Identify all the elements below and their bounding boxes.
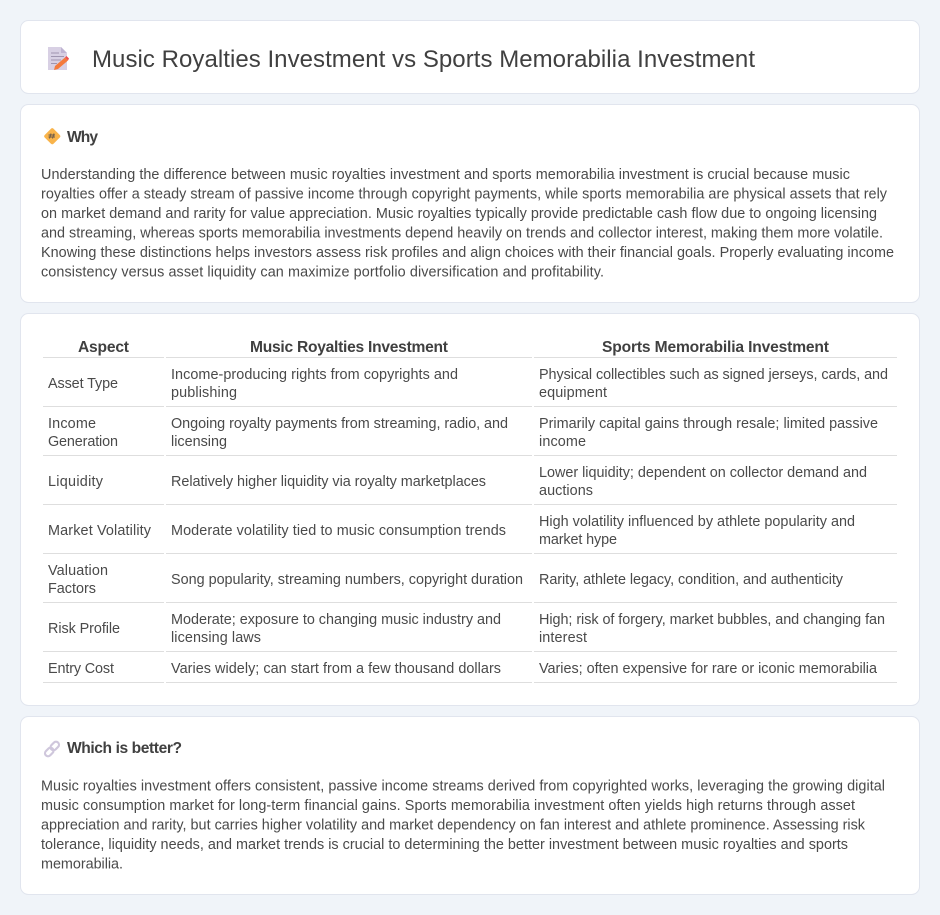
row: asset type: equipment — [539, 385, 607, 401]
heading: why: Why — [67, 129, 98, 146]
row: liquidity: auctions — [539, 483, 593, 499]
row: asset type: Asset Type — [48, 376, 118, 392]
icon: document with pencil — [48, 47, 69, 70]
row: asset type — [48, 367, 888, 401]
title: Music Royalties Investment vs Sports Memorabilia Investment — [92, 46, 755, 73]
text block: why paragraph: on market demand and rarity for value appreciation. Music royalties typically provide predictable cash flow due to ongoing licensing — [41, 206, 877, 222]
row: income generation: licensing — [171, 434, 227, 450]
row: liquidity — [48, 465, 867, 499]
row: market volatility: High volatility influenced by athlete popularity and — [539, 514, 855, 530]
text block: which is better paragraph: appreciation and rarity, but carries higher volatility and market dependency on fan interest and athlete prominence. Assessing risk — [41, 818, 866, 834]
row: risk profile — [48, 612, 885, 646]
text block: why paragraph — [41, 167, 894, 280]
row: asset type: publishing — [171, 385, 237, 401]
row: entry cost: Varies; often expensive for rare or iconic memorabilia — [539, 661, 877, 677]
row: risk profile: Risk Profile — [48, 621, 120, 637]
panel: title card — [20, 20, 920, 94]
table header: Music Royalties Investment — [250, 339, 448, 356]
row: valuation factors: Rarity, athlete legacy, condition, and authenticity — [539, 572, 844, 588]
row: income generation: income — [539, 434, 586, 450]
row: liquidity: Relatively higher liquidity via royalty marketplaces — [171, 474, 486, 490]
text block: which is better paragraph — [41, 778, 885, 872]
row: risk profile: licensing laws — [171, 630, 261, 646]
heading: which is better: Which is better? — [67, 740, 182, 757]
row: income generation: Ongoing royalty payments from streaming, radio, and — [171, 416, 508, 432]
row: entry cost — [48, 661, 877, 677]
row: income generation: Primarily capital gains through resale; limited passive — [539, 416, 878, 432]
row: liquidity: Lower liquidity; dependent on collector demand and — [539, 465, 867, 481]
icon: warning diamond — [43, 127, 61, 145]
text block: why paragraph: and streaming, whereas sports memorabilia investments depend heavily on trends and collector interest, making them more volatile. — [41, 226, 883, 242]
row: valuation factors — [48, 563, 844, 597]
row: income generation — [48, 416, 878, 450]
text block: which is better paragraph: memorabilia. — [41, 856, 123, 872]
row: market volatility — [48, 514, 855, 548]
row: market volatility: market hype — [539, 532, 617, 548]
row: entry cost: Entry Cost — [48, 661, 114, 677]
row: liquidity: Liquidity — [48, 474, 104, 490]
table header: Sports Memorabilia Investment — [602, 339, 829, 356]
text block: which is better paragraph: tolerance, liquidity needs, and market trends is crucial to determining the better investment between music royalties and sports — [41, 837, 848, 853]
panel: why — [20, 104, 920, 302]
row: asset type: Income-producing rights from copyrights and — [171, 367, 458, 383]
row: risk profile: interest — [539, 630, 587, 646]
row: valuation factors: Song popularity, streaming numbers, copyright duration — [171, 572, 523, 588]
row: risk profile: Moderate; exposure to changing music industry and — [171, 612, 501, 628]
row: valuation factors: Factors — [48, 581, 96, 597]
table header: Aspect — [78, 339, 129, 356]
row: asset type: Physical collectibles such as signed jerseys, cards, and — [539, 367, 888, 383]
text block: why paragraph: royalties offer a steady stream of passive income through copyright payments, while sports memorabilia are physical assets that rely — [41, 186, 888, 202]
row: entry cost: Varies widely; can start from a few thousand dollars — [171, 661, 501, 677]
icon: link — [44, 741, 60, 757]
text block: which is better paragraph: Music royalties investment offers consistent, passive income streams derived from copyrighted works, leveraging the growing digital — [41, 778, 885, 794]
row: income generation: Generation — [48, 434, 118, 450]
panel: which is better — [20, 716, 920, 894]
panel: comparison table — [20, 314, 920, 706]
row: valuation factors: Valuation — [48, 563, 108, 579]
row: risk profile: High; risk of forgery, market bubbles, and changing fan — [539, 612, 885, 628]
row: income generation: Income — [48, 416, 96, 432]
text block: why paragraph: Understanding the difference between music royalties investment and sports memorabilia investment is crucial because music — [41, 167, 850, 183]
text block: which is better paragraph: music consumption market for long-term financial gains. Sports memorabilia investment often yields high returns through asset — [41, 798, 855, 814]
table header — [78, 339, 829, 356]
row: market volatility: Moderate volatility tied to music consumption trends — [171, 523, 506, 539]
text block: why paragraph: Knowing these distinctions helps investors assess risk profiles and align choices with their financial goals. Properly evaluating income — [41, 245, 894, 261]
row: market volatility: Market Volatility — [48, 523, 152, 539]
text block: why paragraph: consistency versus asset liquidity can maximize portfolio diversification and profitability. — [41, 264, 604, 280]
